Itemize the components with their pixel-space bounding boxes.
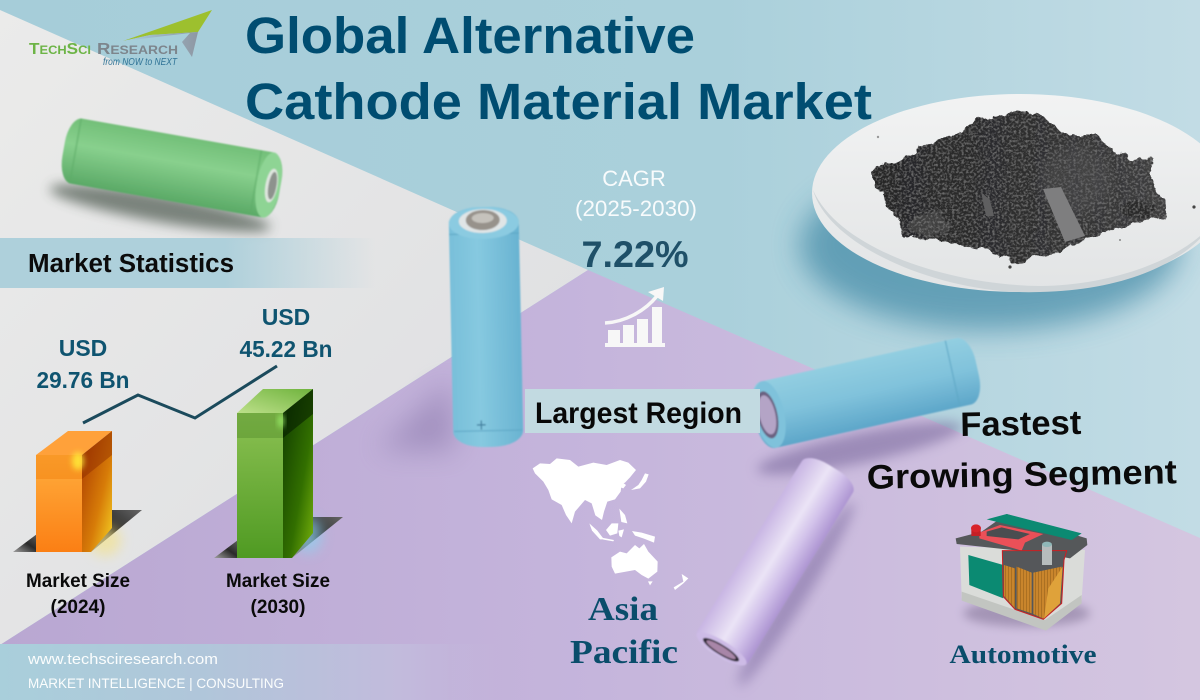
footer band: [0, 644, 500, 700]
CAGR text: (2025-2030): [575, 196, 697, 221]
heading: fastest growing segment: [867, 404, 1177, 497]
label: market size 2030: (2030): [251, 597, 305, 618]
label: USD 29.76 Bn: 29.76 Bn: [36, 367, 130, 393]
logo: TECHSCI: [29, 41, 91, 58]
label: Asia Pacific: Asia: [588, 591, 658, 628]
label: market size 2024: Market Size: [26, 571, 130, 592]
label: USD 29.76 Bn: USD: [59, 335, 107, 361]
background: grey field: [0, 10, 588, 645]
photo: vertical blue battery: +: [476, 415, 487, 435]
title: Global Alternative: [245, 7, 695, 64]
background: purple field: [0, 270, 1200, 700]
photo: purple battery: [692, 452, 863, 691]
band: market statistics: [0, 238, 375, 288]
icon: growth chart: [605, 287, 665, 347]
CAGR text: CAGR: [602, 166, 666, 191]
bar: 2030 green: [214, 389, 343, 558]
label: market size 2030: Market Size: [226, 571, 330, 592]
plate with powder: [800, 94, 1200, 330]
label: Asia Pacific: [570, 591, 678, 671]
band: largest region: Largest Region: [535, 397, 742, 430]
CAGR text: 7.22%: [582, 234, 688, 275]
CAGR text: [575, 166, 697, 275]
icon: car battery: [956, 514, 1090, 631]
label: market size 2030: [226, 571, 330, 618]
photo: green battery: [47, 116, 286, 241]
footer band: www.techsciresearch.com: [27, 651, 218, 668]
title: [245, 7, 872, 130]
photo: horizontal blue battery: [747, 335, 985, 485]
logo: RESEARCH: [97, 41, 178, 58]
photo: vertical blue battery: [378, 206, 524, 450]
label: USD 45.22 Bn: USD: [262, 304, 310, 330]
label: USD 45.22 Bn: [240, 304, 332, 362]
logo: [29, 10, 212, 68]
icon: Asia Pacific map: [533, 458, 688, 590]
logo: from NOW to NEXT: [103, 57, 178, 68]
label: market size 2024: [26, 571, 130, 618]
bar: 2024 orange: [13, 431, 142, 556]
band: market statistics: Market Statistics: [28, 250, 234, 278]
heading: fastest growing segment: Fastest: [960, 404, 1082, 444]
footer band: MARKET INTELLIGENCE | CONSULTING: [28, 675, 284, 691]
label: USD 45.22 Bn: 45.22 Bn: [240, 336, 332, 362]
title: Cathode Material Market: [245, 73, 872, 130]
label: USD 29.76 Bn: [36, 335, 130, 393]
label: automotive: Automotive: [950, 640, 1096, 669]
heading: fastest growing segment: Growing Segment: [867, 453, 1177, 497]
label: market size 2024: (2024): [51, 597, 105, 618]
band: largest region: [525, 389, 760, 433]
label: Asia Pacific: Pacific: [570, 634, 678, 671]
chart: market size line: [83, 366, 277, 423]
